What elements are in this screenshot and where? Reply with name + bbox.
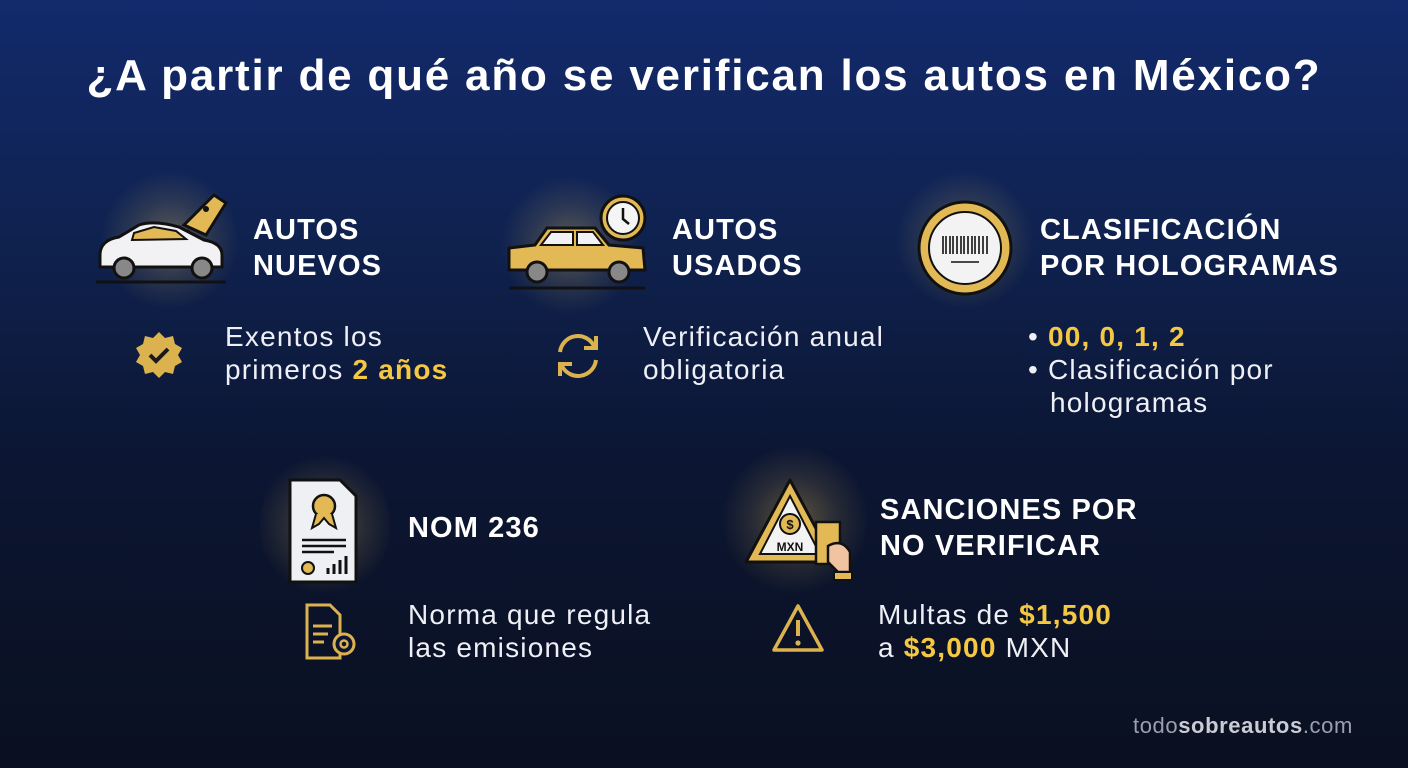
heading: AUTOS	[253, 214, 359, 246]
icon: warning sign MXN	[744, 478, 853, 581]
text	[408, 599, 651, 663]
icon: check badge	[136, 332, 182, 378]
bullet list: • 00, 0, 1, 2	[1028, 321, 1186, 352]
icon: warning sign MXN: MXN	[777, 540, 803, 554]
bullet list: • Clasificación por	[1028, 354, 1274, 385]
heading	[1040, 214, 1339, 282]
icon: hologram seal	[918, 200, 1012, 296]
text: primeros 2 años	[225, 354, 448, 385]
panel: hologramas	[904, 180, 1339, 418]
panel: autos usados	[508, 185, 884, 385]
icon: document gear	[306, 604, 356, 660]
title: ¿A partir de qué año se verifican los autos en México?	[86, 51, 1321, 100]
text	[878, 599, 1112, 663]
heading: USADOS	[672, 250, 803, 282]
text	[643, 321, 884, 385]
heading: CLASIFICACIÓN	[1040, 214, 1281, 246]
bullet list: hologramas	[1050, 387, 1208, 418]
icon: warning	[772, 604, 824, 652]
text	[225, 321, 448, 385]
text: obligatoria	[643, 354, 785, 385]
bullet list	[1028, 321, 1274, 418]
icon: white car with tag	[96, 193, 228, 284]
icon: certificate document	[288, 478, 358, 584]
text: Multas de $1,500	[878, 599, 1112, 630]
panel: NOM 236	[264, 464, 651, 663]
heading	[253, 214, 382, 282]
heading: NO VERIFICAR	[880, 530, 1101, 562]
icon: gold car with clock	[508, 194, 647, 290]
heading: AUTOS	[672, 214, 778, 246]
icon: warning sign MXN: $	[786, 517, 794, 532]
icon: refresh	[558, 334, 598, 378]
footer brand: todosobreautos.com	[1133, 713, 1353, 738]
heading: NUEVOS	[253, 250, 382, 282]
heading: SANCIONES POR	[880, 494, 1138, 526]
text: Exentos los	[225, 321, 383, 352]
heading	[672, 214, 803, 282]
panel: sanciones	[730, 455, 1138, 663]
heading: POR HOLOGRAMAS	[1040, 250, 1339, 282]
text: las emisiones	[408, 632, 593, 663]
panel: autos nuevos	[96, 180, 448, 385]
heading	[880, 494, 1138, 562]
text: a $3,000 MXN	[878, 632, 1071, 663]
text: Norma que regula	[408, 599, 651, 630]
text: Verificación anual	[643, 321, 884, 352]
heading: NOM 236	[408, 512, 540, 544]
